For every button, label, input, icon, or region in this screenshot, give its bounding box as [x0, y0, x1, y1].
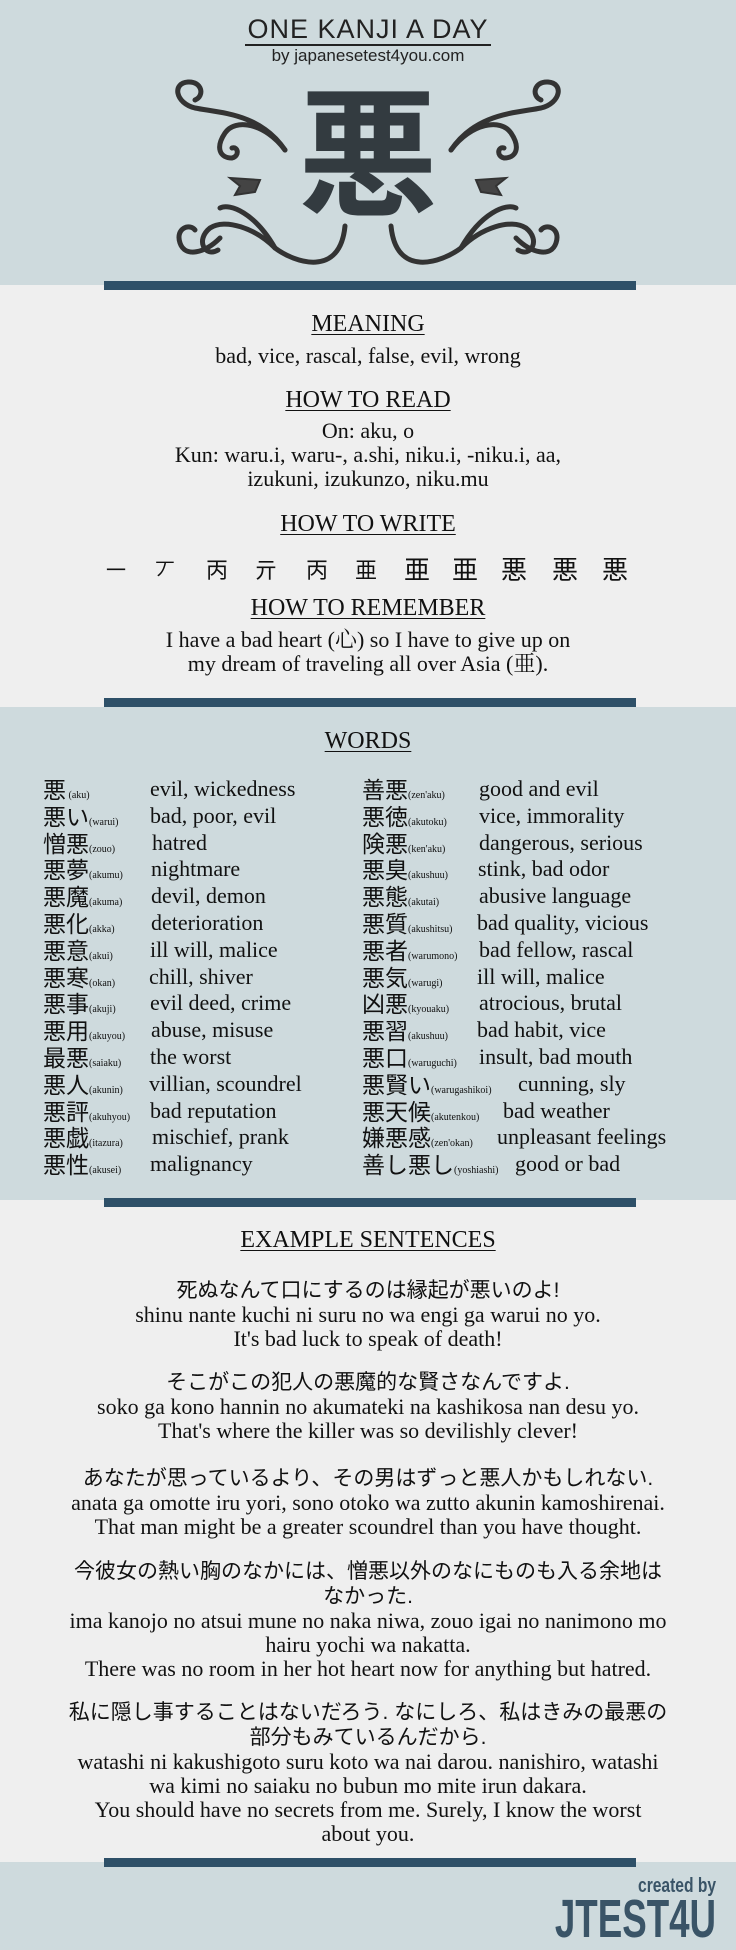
example 5: You should have no secrets from me. Surely, I know the worst	[95, 1797, 641, 1822]
words list: atrocious, brutal	[479, 990, 622, 1015]
text: bad, vice, rascal, false, evil, wrong	[215, 343, 521, 368]
example 2: That's where the killer was so devilishly clever!	[158, 1418, 578, 1443]
stroke order: 悪	[501, 550, 527, 587]
example 4	[70, 1560, 666, 1681]
example 5: wa kimi no saiaku no bubun mo mite irun dakara.	[149, 1773, 587, 1798]
footer background	[0, 1862, 736, 1950]
words list: bad fellow, rascal	[479, 937, 633, 962]
words list: bad reputation	[150, 1098, 276, 1123]
words list: the worst	[150, 1044, 231, 1069]
stroke order: 悪	[602, 550, 628, 587]
words list: 悪態(akutai)	[362, 878, 439, 912]
words list: 憎悪(zouo)	[43, 825, 115, 859]
words list: evil deed, crime	[150, 990, 291, 1015]
words list: bad quality, vicious	[477, 910, 648, 935]
words list: 最悪(saiaku)	[43, 1039, 121, 1073]
text: my dream of traveling all over Asia (亜).	[188, 651, 548, 676]
example 5: 私に隠し事することはないだろう. なにしろ、私はきみの最悪の	[69, 1701, 667, 1724]
words list: 嫌悪感(zen'okan)	[362, 1119, 473, 1153]
example 5: watashi ni kakushigoto suru koto wa nai darou. nanishiro, watashi	[77, 1749, 659, 1774]
words list: ill will, malice	[477, 964, 605, 989]
text: izukuni, izukunzo, niku.mu	[247, 466, 489, 491]
words list: 悪者(warumono)	[362, 932, 457, 966]
words list: ill will, malice	[150, 937, 278, 962]
section: how to remember: HOW TO REMEMBER	[251, 595, 485, 621]
example sentences heading: EXAMPLE SENTENCES	[240, 1227, 496, 1253]
words list: 悪化(akka)	[43, 905, 115, 939]
words list: 悪事(akuji)	[43, 985, 116, 1019]
stroke order	[106, 550, 628, 587]
divider bar	[104, 698, 636, 707]
words list: good and evil	[479, 776, 599, 801]
words list: 悪評(akuhyou)	[43, 1093, 130, 1127]
stroke order: 亜	[404, 550, 430, 587]
divider bar	[104, 281, 636, 290]
stroke order: 丙	[306, 553, 328, 585]
words list: abusive language	[479, 883, 631, 908]
words list: insult, bad mouth	[479, 1044, 632, 1069]
example 1: It's bad luck to speak of death!	[233, 1326, 503, 1351]
words list: bad weather	[503, 1098, 610, 1123]
words list: dangerous, serious	[479, 830, 643, 855]
divider bar	[104, 1198, 636, 1207]
credit logo: JTEST4U	[555, 1889, 716, 1949]
example 5: 部分もみているんだから.	[250, 1726, 486, 1749]
divider bar	[104, 1858, 636, 1867]
words list: 凶悪(kyouaku)	[362, 985, 449, 1019]
stroke order: 一	[106, 554, 126, 583]
example 4: hairu yochi wa nakatta.	[265, 1632, 471, 1657]
stroke order: 悪	[552, 550, 578, 587]
words list: stink, bad odor	[478, 856, 609, 881]
text: I have a bad heart (心) so I have to give up on	[166, 627, 570, 652]
example 4: なかった.	[323, 1585, 413, 1608]
words list: unpleasant feelings	[497, 1124, 666, 1149]
example 3: anata ga omotte iru yori, sono otoko wa zutto akunin kamoshirenai.	[71, 1490, 665, 1515]
example 3: あなたが思っているより、その男はずっと悪人かもしれない.	[83, 1467, 653, 1490]
words list: 悪賢い(warugashikoi)	[362, 1066, 492, 1100]
words list: 悪 (aku)	[43, 771, 90, 805]
text: Kun: waru.i, waru-, a.shi, niku.i, -niku.i, aa,	[175, 442, 561, 467]
words list: bad habit, vice	[477, 1017, 606, 1042]
words list: mischief, prank	[152, 1124, 289, 1149]
words list: deterioration	[151, 910, 263, 935]
subtitle: by japanesetest4you.com	[272, 46, 464, 65]
words list: 悪人(akunin)	[43, 1066, 123, 1100]
title: ONE KANJI A DAY	[247, 14, 489, 44]
example 5	[69, 1701, 667, 1846]
example 4: ima kanojo no atsui mune no naka niwa, zouo igai no nanimono mo	[70, 1608, 666, 1633]
words list: 善し悪し(yoshiashi)	[362, 1146, 498, 1180]
example 5: about you.	[322, 1821, 414, 1846]
words list: hatred	[152, 830, 207, 855]
example 2	[97, 1371, 639, 1443]
words list: 悪臭(akushuu)	[362, 851, 448, 885]
text: On: aku, o	[322, 418, 414, 443]
words background	[0, 707, 736, 1200]
example 1: 死ぬなんて口にするのは縁起が悪いのよ!	[176, 1279, 560, 1302]
stroke order: 丙	[206, 553, 228, 585]
words list: 悪性(akusei)	[43, 1146, 121, 1180]
words list: 悪徳(akutoku)	[362, 798, 447, 832]
example 3	[71, 1467, 665, 1539]
example 1	[135, 1279, 601, 1351]
words list: malignancy	[150, 1151, 253, 1176]
header background	[0, 0, 736, 285]
words list: devil, demon	[151, 883, 266, 908]
section: meaning: MEANING	[311, 311, 425, 337]
section: how to write: HOW TO WRITE	[280, 511, 456, 537]
words list: evil, wickedness	[150, 776, 295, 801]
words list: 悪口(waruguchi)	[362, 1039, 457, 1073]
words list: vice, immorality	[479, 803, 624, 828]
words list: 悪天候(akutenkou)	[362, 1093, 479, 1127]
words list: 悪夢(akumu)	[43, 851, 123, 885]
example 2: soko ga kono hannin no akumateki na kashikosa nan desu yo.	[97, 1394, 639, 1419]
words list: 悪意(akui)	[43, 932, 113, 966]
words list: 悪寒(okan)	[43, 959, 115, 993]
words heading: WORDS	[325, 728, 411, 754]
example 1: shinu nante kuchi ni suru no wa engi ga warui no yo.	[135, 1302, 601, 1327]
credit logo: created by	[638, 1875, 716, 1897]
main kanji: 悪	[298, 44, 438, 246]
stroke order: 亜	[355, 553, 377, 585]
example 2: そこがこの犯人の悪魔的な賢さなんですよ.	[166, 1371, 570, 1394]
words list: abuse, misuse	[151, 1017, 273, 1042]
words list: chill, shiver	[149, 964, 253, 989]
words list: bad, poor, evil	[150, 803, 276, 828]
example 3: That man might be a greater scoundrel than you have thought.	[95, 1514, 641, 1539]
stroke order: 丆	[155, 554, 175, 583]
words list: nightmare	[151, 856, 240, 881]
words list: 悪習(akushuu)	[362, 1012, 448, 1046]
words list: 悪い(warui)	[43, 798, 118, 832]
words list: 悪気(warugi)	[362, 959, 442, 993]
words list	[43, 771, 666, 1180]
section: how to read: HOW TO READ	[285, 387, 451, 413]
words list: good or bad	[515, 1151, 620, 1176]
stroke order: 亓	[255, 553, 277, 585]
example 4: There was no room in her hot heart now for anything but hatred.	[85, 1656, 651, 1681]
words list: 善悪(zen'aku)	[362, 771, 445, 805]
words list: 悪戯(itazura)	[43, 1119, 123, 1153]
words list: 悪用(akuyou)	[43, 1012, 125, 1046]
words list: 悪魔(akuma)	[43, 878, 122, 912]
ornament: swirls	[175, 80, 561, 265]
stroke order: 亜	[452, 550, 478, 587]
words list: cunning, sly	[518, 1071, 626, 1096]
words list: 悪質(akushitsu)	[362, 905, 452, 939]
example 4: 今彼女の熱い胸のなかには、憎悪以外のなにものも入る余地は	[74, 1560, 662, 1583]
words list: villian, scoundrel	[149, 1071, 302, 1096]
words list: 険悪(ken'aku)	[362, 825, 445, 859]
